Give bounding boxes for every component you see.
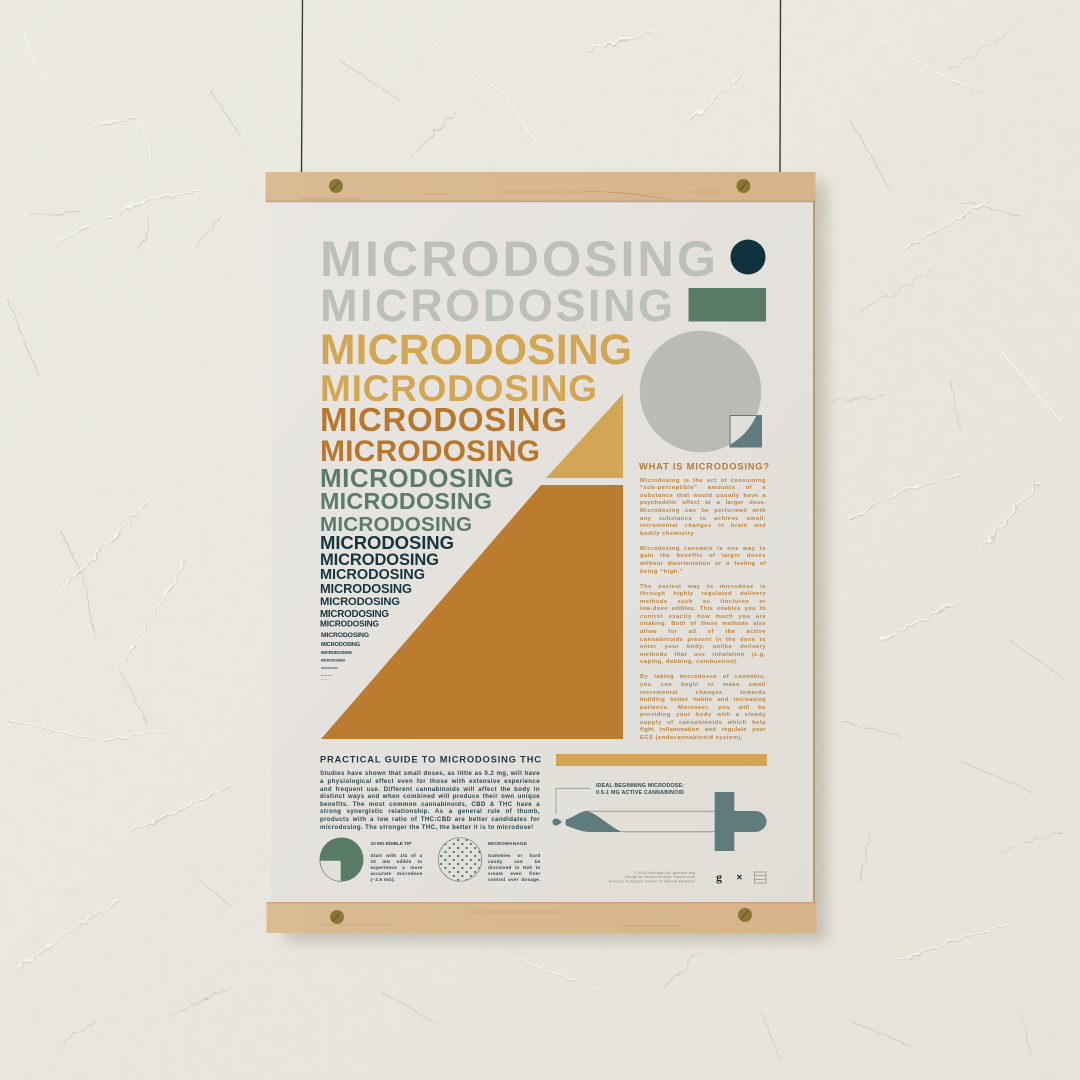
text block: what is microdosing: incremental changes towards <box>640 690 766 696</box>
title row 13: MICRODOSING <box>320 581 412 596</box>
text block: what is microdosing: enter your body, unlike delivery <box>640 644 766 650</box>
text block: practical guide: Studies have shown that small doses, as little as 0.2 mg, will have <box>320 770 540 777</box>
icon: dropper with drop <box>552 792 766 851</box>
title row 15: MICRODOSING <box>320 609 389 620</box>
footer credits <box>609 871 695 884</box>
text block: what is microdosing: gain the benefits of larger doses <box>640 553 766 559</box>
title row 4: MICRODOSING <box>320 368 597 409</box>
title row 6: MICRODOSING <box>320 435 540 468</box>
title row 5: MICRODOSING <box>320 401 567 438</box>
shape: navy circle <box>730 240 766 274</box>
title row 17: MICRODOSING <box>321 632 369 639</box>
logo: times sign: × <box>736 872 742 884</box>
text block: what is microdosing: providing your body with a steady <box>640 712 766 718</box>
title row 20: MICRODOSING <box>321 658 345 662</box>
title row 18: MICRODOSING <box>321 642 360 648</box>
text block: 10 mg edible tip: (~2.5 mG). <box>370 877 395 882</box>
title row 1: MICRODOSING <box>320 230 716 287</box>
text block: what is microdosing: By taking microdoses of cannabis, <box>640 674 766 680</box>
text block: what is microdosing: substance that would usually have a <box>640 493 766 499</box>
text block: practical guide: products with a low ratio of THC:CBD are better candidates for <box>320 816 540 823</box>
title row 23: MICRODOSING <box>321 679 327 681</box>
icon: edible quarter circle <box>320 838 364 882</box>
text block: what is microdosing: Microdosing is the act of consuming <box>640 478 766 484</box>
label: 10 mg edible tip: 10 MG EDIBLE TIP <box>370 841 412 847</box>
text block: what is microdosing: you can begin to make small <box>640 682 766 688</box>
title row 9: MICRODOSING <box>320 513 472 536</box>
text block: what is microdosing: fight inflammation and regulate your <box>640 727 766 733</box>
text block: micromanage: control over dosage. <box>488 877 540 882</box>
text block: what is microdosing: without disorientation or a feeling of <box>640 561 766 567</box>
title row 7: MICRODOSING <box>320 463 514 493</box>
text block: what is microdosing: psychedelic effect at a larger dose. <box>640 500 766 506</box>
text block: 10 mg edible tip: experience a more <box>370 865 422 870</box>
text block: what is microdosing: building better habits and increasing <box>640 697 766 703</box>
heading: what is microdosing: WHAT IS MICRODOSING? <box>639 462 769 472</box>
stacked MICRODOSING title, shrinking rows <box>320 230 716 681</box>
text block: what is microdosing: cannabinoids present in the dose to <box>640 637 766 643</box>
text block: what is microdosing: through highly regulated delivery <box>640 591 766 597</box>
title row 8: MICRODOSING <box>320 488 492 514</box>
text block: what is microdosing: Microdosing can be performed with <box>640 508 766 514</box>
text block: micromanage <box>488 853 540 882</box>
heading: practical guide: PRACTICAL GUIDE TO MICRODOSING THC <box>320 755 541 765</box>
text block: what is microdosing: The easiest way to microdose is <box>640 584 766 590</box>
text block: practical guide: a physiological effect even for those with extensive experience <box>320 778 540 785</box>
gold bar <box>556 754 767 766</box>
text block: what is microdosing: ECS (endocannabinoid system). <box>640 735 743 741</box>
title row 21: MICRODOSING <box>321 667 338 670</box>
text block: what is microdosing: incremental changes in brain and <box>640 523 766 529</box>
label: micromanage: MICROMANAGE <box>488 841 528 847</box>
text block: practical guide <box>320 770 540 831</box>
text block: practical guide: benefits. The most common cannabinoids, CBD & THC have a <box>320 801 540 808</box>
footer credits: © 2019 Goldleaf Ltd. goldleaf.org <box>634 871 695 875</box>
poster paper sheet <box>271 200 815 904</box>
text block: micromanage: create even finer <box>488 871 540 876</box>
text block: what is microdosing <box>640 478 766 741</box>
title row 10: MICRODOSING <box>320 532 454 553</box>
footer credits: Sources: European Journal of Internal Medicine <box>609 880 695 884</box>
text block: what is microdosing: intaking. Both of these methods also <box>640 621 766 627</box>
text block: what is microdosing: supply of cannabinoids which help <box>640 720 766 726</box>
text block: what is microdosing: control exactly how much you are <box>640 614 766 620</box>
text block: micromanage: dissolved in H20 to <box>488 865 540 870</box>
callout: ideal beginning microdose <box>556 783 684 814</box>
text block: 10 mg edible tip: Start with 1/4 of a <box>370 853 422 858</box>
text block: what is microdosing: “sub-perceptible” amounts of a <box>640 485 766 491</box>
title row 22: MICRODOSING <box>321 675 333 677</box>
title row 16: MICRODOSING <box>320 618 379 628</box>
text block: practical guide: distinct ways and when combined will produce their own unique <box>320 793 540 800</box>
text block: 10 mg edible tip: accurate microdose <box>370 871 422 876</box>
shape: small gold triangle <box>546 394 623 478</box>
top wooden rail <box>266 172 816 202</box>
text block: micromanage: Gummies or hard <box>488 853 540 858</box>
footer credits: Design by Yackov Design, Yackov.com <box>625 875 695 879</box>
text block: 10 mg edible tip: 10 mG edible to <box>370 859 422 864</box>
callout: ideal beginning microdose: 0.5-1 MG ACTIVE CANNABINOID <box>596 790 684 796</box>
text block: what is microdosing: methods that use inhalation (e.g. <box>640 652 766 658</box>
icon: micromanage dotted circle <box>438 838 482 881</box>
logo: g mark: g <box>716 870 722 884</box>
logo: small box mark <box>754 872 766 883</box>
text block: what is microdosing: Microdosing cannabis is one way to <box>640 546 766 552</box>
text block: what is microdosing: patience. Moreover, you will be <box>640 705 766 711</box>
text block: what is microdosing: any substance to achieve small, <box>640 516 766 522</box>
text block: practical guide: and frequent use. Different cannabinoids will affect the body in <box>320 786 540 792</box>
text block: what is microdosing: methods such as tinctures or <box>640 599 766 605</box>
callout: ideal beginning microdose: IDEAL BEGINNING MICRODOSE: <box>596 783 684 789</box>
title row 12: MICRODOSING <box>320 567 425 583</box>
title row 19: MICRODOSING <box>321 650 353 655</box>
poster shadow on wall <box>285 182 827 942</box>
text block: what is microdosing: allow for all of the active <box>640 629 766 635</box>
text block: micromanage: candy can be <box>488 859 540 864</box>
text block: what is microdosing: being “high.” <box>640 569 683 575</box>
hanging wires <box>302 0 780 172</box>
text block: what is microdosing: vaping, dabbing, combustion). <box>640 659 739 665</box>
text block: practical guide: microdosing. The stronger the THC, the better it is to microdose! <box>320 824 534 831</box>
shape: large orange trapezoid <box>321 485 623 739</box>
title row 14: MICRODOSING <box>320 596 400 608</box>
text block: practical guide: strong synergistic relationship. As a general rule of thumb, <box>320 808 540 815</box>
text block: 10 mg edible tip <box>370 853 422 882</box>
shape: green rectangle <box>688 288 766 322</box>
text block: what is microdosing: low-dose edibles. This enables you to <box>640 606 766 612</box>
bottom wooden rail <box>266 902 816 933</box>
text block: what is microdosing: bodily chemistry. <box>640 531 696 537</box>
title row 3: MICRODOSING <box>320 327 632 374</box>
title row 2: MICRODOSING <box>320 280 673 331</box>
shape: large grey circle with teal square <box>640 331 762 452</box>
title row 11: MICRODOSING <box>320 551 439 569</box>
